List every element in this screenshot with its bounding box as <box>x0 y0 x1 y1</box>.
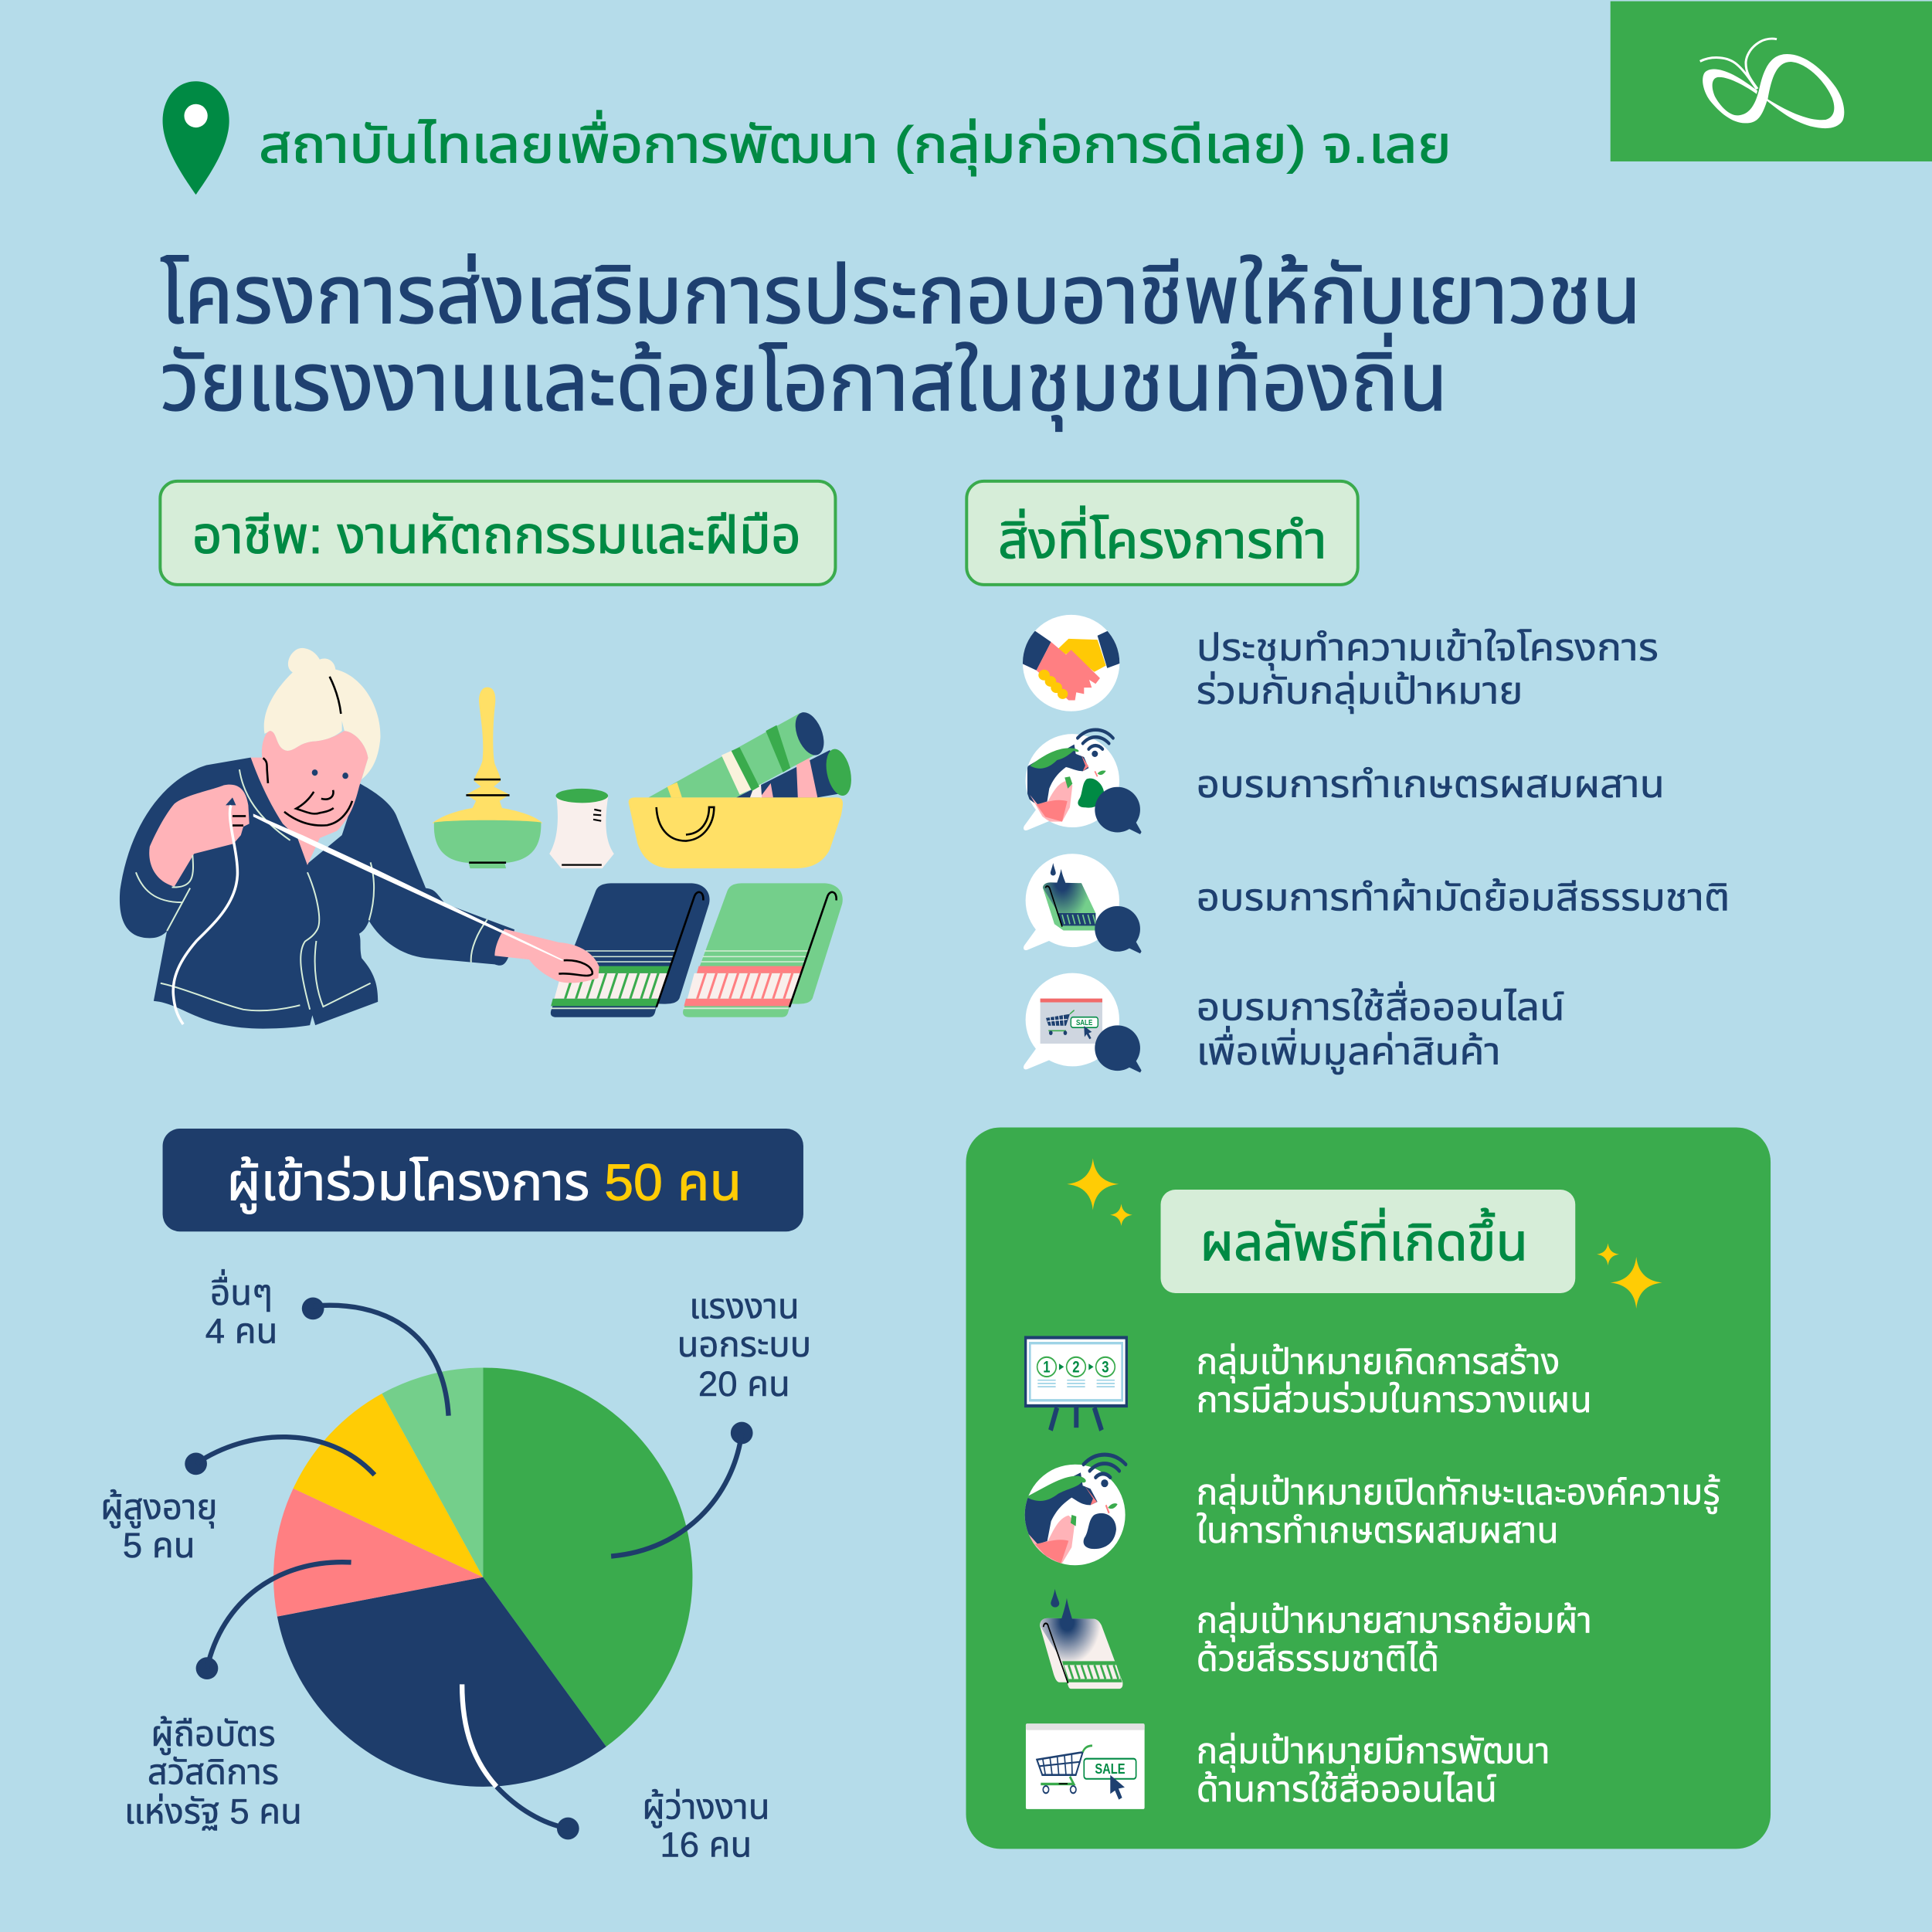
callout: elderly: ผู้สูงอายุ <box>100 1488 217 1529</box>
facial features <box>233 677 352 826</box>
lidded bowl <box>432 688 542 868</box>
results heading <box>1161 1190 1575 1293</box>
icon: dye bubble <box>1024 854 1142 953</box>
callout: informal workers: นอกระบบ <box>677 1325 811 1364</box>
results text: กลุ่มเป้าหมายเปิดทักษะและองค์ความรู้ <box>1197 1472 1720 1514</box>
callout: others <box>205 1269 449 1416</box>
icon: integrated farming bubble <box>1024 730 1142 834</box>
callout: others: 4 คน <box>205 1312 277 1351</box>
activity list text <box>1197 626 1730 1075</box>
activity icons <box>1020 615 1142 1073</box>
left hand <box>149 785 250 887</box>
icon: planning board: 2 <box>1072 1359 1080 1377</box>
callout: welfare card holders: ผู้ถือบัตร <box>151 1714 276 1755</box>
jacket <box>120 758 514 1029</box>
activity list text: ร่วมกับกลุ่มเป้าหมาย <box>1197 670 1523 714</box>
title <box>160 250 1642 432</box>
icon: online sale bubble: SALE <box>1076 1018 1092 1027</box>
rolled fabrics <box>648 711 854 797</box>
pie chart <box>273 1367 692 1787</box>
illustration: woman weaving with crafts <box>120 648 854 1029</box>
logo panel <box>1611 2 1932 161</box>
participants heading <box>163 1129 803 1231</box>
callout: informal workers: แรงงาน <box>689 1287 800 1326</box>
hanging thread <box>173 805 237 1024</box>
callout: unemployed <box>462 1684 770 1865</box>
icon: online sale bubble <box>1024 973 1142 1073</box>
icon: online sale window: SALE <box>1095 1761 1125 1777</box>
activity list text: อบรมการใช้สื่อออนไลน์ <box>1197 982 1565 1029</box>
icon: sparkles <box>1067 1158 1662 1309</box>
icon: online sale window <box>1026 1723 1145 1809</box>
label: occupation <box>160 481 835 585</box>
navy folded cloth <box>551 883 710 1017</box>
title: โครงการส่งเสริมการประกอบอาชีพให้กับเยาวชน <box>160 250 1642 341</box>
icon: planning board <box>1024 1336 1128 1431</box>
finger outline <box>559 960 593 976</box>
callout: welfare card holders: สวัสดิการ <box>148 1753 279 1792</box>
participants heading: ผู้เข้าร่วมโครงการ 50 คน <box>226 1154 742 1214</box>
panel: results <box>966 1127 1771 1849</box>
activity list text: ประชุมทำความเข้าใจโครงการ <box>1197 626 1659 671</box>
results text <box>1197 1341 1720 1809</box>
results text: การมีส่วนร่วมในการวางแผน <box>1197 1380 1592 1420</box>
green folded cloth <box>683 883 843 1017</box>
results text: ในการทำเกษตรผสมผสาน <box>1197 1510 1559 1550</box>
callout: welfare card holders: แห่งรัฐ 5 คน <box>124 1792 302 1832</box>
label: project activities <box>966 481 1358 585</box>
callout: others: อื่นๆ <box>210 1269 273 1312</box>
results text: กลุ่มเป้าหมายมีการพัฒนา <box>1197 1730 1550 1772</box>
activity list text: อบรมการทำเกษตรผสมผสาน <box>1197 763 1665 806</box>
label: project activities: สิ่งที่โครงการทำ <box>998 506 1327 570</box>
activity list text: อบรมการทำผ้ามัดย้อมสีธรรมชาติ <box>1197 877 1730 919</box>
icon: farming circle <box>1022 1455 1126 1565</box>
results heading: ผลลัพธ์ที่เกิดขึ้น <box>1200 1208 1528 1272</box>
thread <box>253 813 564 961</box>
results text: กลุ่มเป้าหมายเกิดการสร้าง <box>1197 1341 1560 1383</box>
callout: informal workers <box>611 1287 811 1557</box>
icon: location pin <box>163 81 229 195</box>
title: วัยแรงงานและด้อยโอกาสในชุมชนท้องถิ่น <box>160 332 1448 432</box>
icon: dyed cloth <box>1040 1589 1122 1689</box>
callout: elderly <box>100 1437 375 1565</box>
face and neck <box>251 731 368 865</box>
jacket stitching <box>136 769 487 1010</box>
callout: informal workers: 20 คน <box>698 1364 790 1404</box>
hair <box>264 648 380 779</box>
icon: planning board: 3 <box>1102 1359 1109 1377</box>
results text: ด้วยสีธรรมชาติได้ <box>1197 1638 1439 1679</box>
icon: handshake <box>1020 615 1122 711</box>
callout: welfare card holders <box>124 1562 351 1832</box>
callout: elderly: 5 คน <box>123 1526 195 1565</box>
results text: กลุ่มเป้าหมายสามารถย้อมผ้า <box>1197 1600 1592 1642</box>
activity list text: เพื่อเพิ่มมูลค่าสินค้า <box>1197 1026 1501 1075</box>
right hand <box>494 929 599 983</box>
callout: unemployed: 16 คน <box>660 1825 752 1865</box>
icon: planning board: 1 <box>1043 1359 1051 1377</box>
callout: unemployed: ผู้ว่างงาน <box>642 1787 770 1828</box>
basket <box>629 797 843 868</box>
results text: ด้านการใช้สื่อออนไลน์ <box>1197 1765 1497 1809</box>
label: occupation: อาชีพ: งานหัตถกรรมและฝีมือ <box>192 507 801 565</box>
cup <box>549 789 614 868</box>
organisation heading: สถาบันไทเลยเพื่อการพัฒนา (กลุ่มก่อการดีเลย) จ.เลย <box>259 110 1452 177</box>
